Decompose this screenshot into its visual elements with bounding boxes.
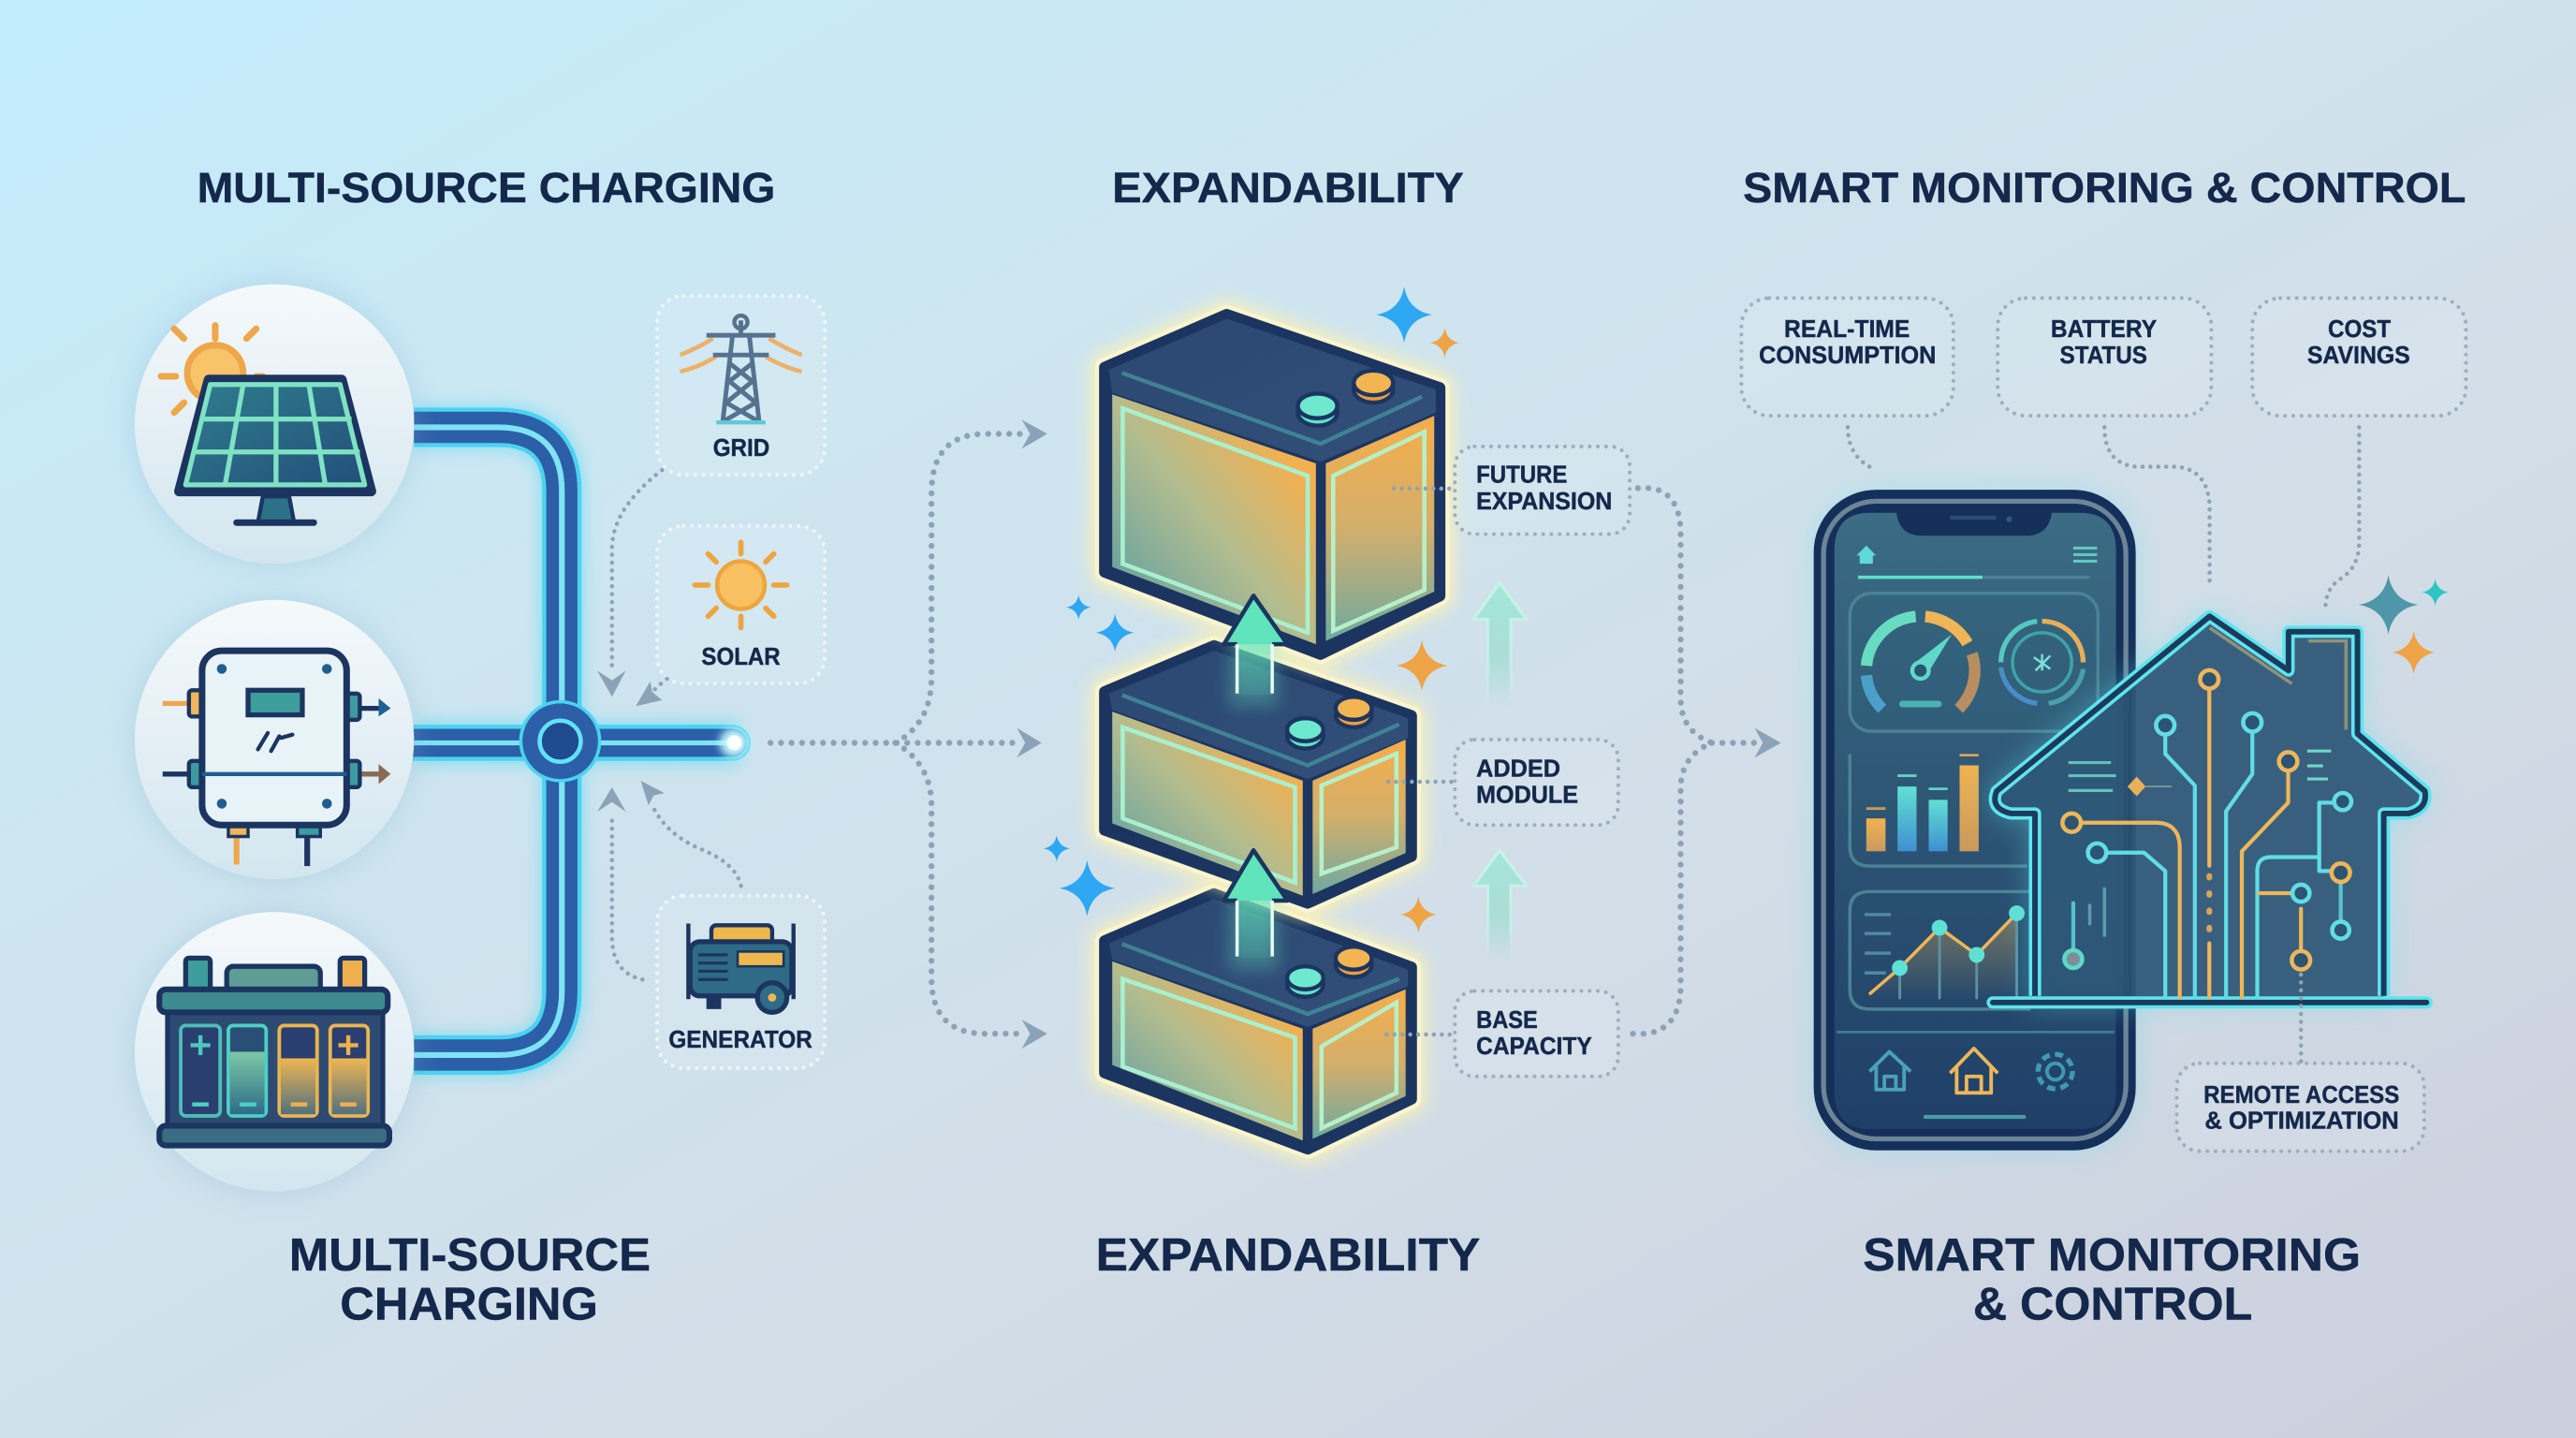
caption: multi-source charging: MULTI-SOURCE	[289, 1230, 651, 1281]
arrow: faded growth upper	[1473, 582, 1526, 707]
source circle: battery bank	[135, 912, 414, 1192]
sparkles near house	[2359, 575, 2449, 674]
label: future expansion	[1394, 447, 1630, 535]
callout: remote access and optimization	[2177, 975, 2424, 1152]
dotted feeds into junction	[597, 470, 741, 979]
source box: solar: SOLAR	[701, 642, 781, 670]
arrow: faded growth lower	[1473, 850, 1526, 961]
callout: remote access and optimization: REMOTE ACCESS	[2203, 1080, 2399, 1108]
arrow: stack upward upper	[1224, 595, 1287, 707]
label: future expansion: EXPANSION	[1476, 487, 1612, 515]
circuit traces	[2062, 670, 2351, 998]
phone	[1814, 490, 2136, 1151]
source box: grid: GRID	[713, 433, 769, 462]
callout: real-time consumption: REAL-TIME	[1784, 315, 1910, 343]
dotted bracket from batteries to phone	[1633, 488, 1781, 1034]
source box: grid	[657, 296, 825, 475]
bottom navigation	[1837, 1032, 2115, 1117]
arrow: stack upward lower	[1224, 850, 1287, 970]
bar chart card	[1850, 755, 2027, 866]
caption: multi-source charging: CHARGING	[340, 1280, 598, 1330]
caption: expandability: EXPANDABILITY	[1096, 1230, 1480, 1281]
dotted branch from charging to batteries	[770, 420, 1047, 1049]
line chart card	[1850, 891, 2030, 1009]
sparkles around stack	[1044, 286, 1459, 932]
callout: remote access and optimization: & OPTIMIZATION	[2204, 1106, 2399, 1134]
caption: smart monitoring and control: & CONTROL	[1973, 1280, 2252, 1330]
callout: real-time consumption	[1741, 298, 1954, 468]
panel: smart monitoring	[1741, 298, 2466, 1152]
battery: base capacity	[1105, 894, 1412, 1149]
caption: multi-source charging	[289, 1230, 651, 1330]
battery: added module	[1105, 646, 1412, 902]
smart home	[1993, 616, 2426, 1003]
callout: cost savings	[2252, 298, 2466, 610]
battery: future expansion	[1105, 315, 1440, 654]
heading: multi-source charging: MULTI-SOURCE CHARGING	[198, 164, 775, 212]
caption: smart monitoring and control: SMART MONITORING	[1863, 1230, 2361, 1281]
heading: expandability: EXPANDABILITY	[1112, 164, 1464, 212]
callout: cost savings: COST	[2328, 315, 2391, 343]
heading: smart monitoring and control: SMART MONITORING & CONTROL	[1743, 164, 2466, 212]
source box: generator	[657, 896, 825, 1068]
source box: generator: GENERATOR	[668, 1025, 812, 1053]
label: future expansion: FUTURE	[1476, 461, 1567, 489]
label: base capacity: BASE	[1476, 1005, 1538, 1034]
label: added module	[1388, 740, 1618, 825]
app header	[1856, 546, 2097, 578]
label: added module: MODULE	[1476, 781, 1578, 809]
label: added module: ADDED	[1476, 754, 1560, 782]
source circle: inverter	[135, 600, 414, 879]
label: base capacity: CAPACITY	[1476, 1032, 1592, 1060]
callout: battery status: BATTERY	[2051, 315, 2158, 343]
gauge card	[1850, 594, 2098, 731]
callout: real-time consumption: CONSUMPTION	[1759, 341, 1936, 369]
source box: solar	[657, 526, 825, 683]
label: base capacity	[1386, 991, 1618, 1077]
callout: cost savings: SAVINGS	[2307, 341, 2410, 369]
power bus pipes	[414, 427, 749, 1055]
panel: multi-source charging	[135, 285, 825, 1192]
callout: battery status: STATUS	[2060, 341, 2147, 369]
panel: expandability battery stack	[1044, 286, 1630, 1149]
source circle: solar panel	[135, 285, 414, 564]
callout: battery status	[1998, 298, 2211, 585]
caption: smart monitoring and control	[1863, 1230, 2361, 1330]
